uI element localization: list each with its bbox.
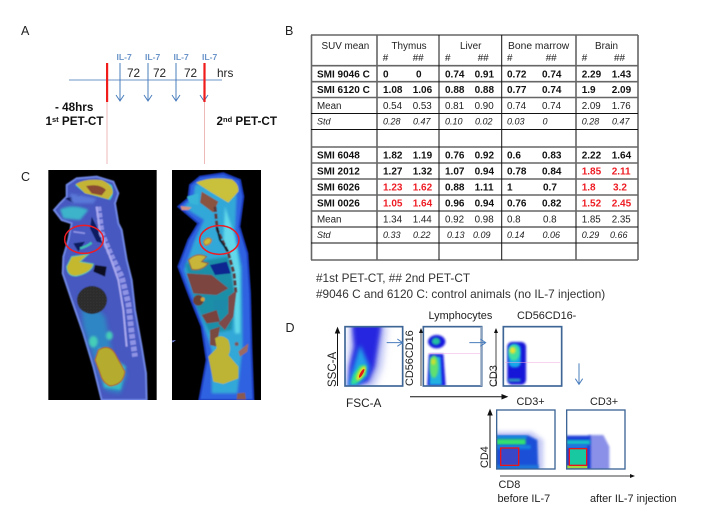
flow plot labels: CD8 [498,479,520,491]
lung [210,262,231,275]
treated mean row [317,214,631,226]
CD3 gate plot [503,327,562,386]
abdominal organs [187,273,228,295]
treated animal rows: 0.76 [507,198,527,210]
SUV table [311,35,638,260]
brain [196,178,238,203]
treated std row: 0.14 [507,230,525,240]
treated animal rows: 0.7 [543,182,557,194]
gut [77,286,107,314]
airway dark areas [65,195,103,252]
control animal rows: 0.77 [507,85,527,96]
control animal rows: SMI 9046 C [317,70,370,80]
brain [76,180,113,199]
PET scan before IL-7 [48,170,157,400]
treated animal rows: 0.94 [475,166,495,178]
first PET-CT label: 1 [46,115,52,128]
table header: Thymus [392,41,427,52]
flow plot labels: CD3+ [516,396,545,408]
table header: # [582,53,588,64]
treated animal rows: 1.64 [612,150,632,162]
first PET-CT label: - 48hrs [55,101,94,114]
control std row: Std [317,116,332,126]
treated animal rows: 0.94 [475,198,495,210]
table header: ## [614,53,625,64]
treated animal rows: 2.22 [582,150,602,162]
table header: # [383,53,389,64]
treated animal rows: 2.45 [612,198,632,210]
table header: # [445,53,451,64]
treated animal rows: 0.78 [507,166,527,178]
control animal rows: 0.74 [542,85,562,96]
control std row: 0.02 [475,116,493,126]
interval labels: hrs [217,66,233,80]
table header: ## [546,53,557,64]
first PET-CT label: PET-CT [59,115,104,128]
treated animal rows: 0.84 [542,166,562,178]
interval labels: 72 [153,66,166,80]
treated animal rows: 1.8 [582,182,596,194]
CD4/CD8 before IL-7 [495,410,555,470]
CD4/CD8 after IL-7 [565,410,625,470]
treated mean row: 2.35 [612,214,631,226]
IL-7 labels [116,52,217,62]
treated animal rows [317,150,632,210]
control mean row: Mean [317,101,342,112]
table header: Liver [460,41,482,52]
treated mean row: 0.92 [445,214,464,226]
panel D flow plots, upper row [345,323,583,388]
control std row: 0 [542,116,548,126]
control animal rows: 1.08 [383,85,403,96]
control mean row [317,101,631,112]
control mean row: 0.74 [542,101,562,112]
flow plot labels: CD3+ [590,396,618,408]
control animal rows: 1.06 [413,85,433,96]
pale drop lines [107,102,204,164]
thymus uptake [203,238,212,245]
first PET-CT label: st [52,115,59,124]
body outline [54,177,147,400]
treated animal rows: 2.11 [612,166,631,178]
treated animal rows: 1.62 [413,182,433,194]
treated mean row: 1.44 [413,214,432,226]
control mean row: 0.54 [383,101,403,112]
first PET-CT label [46,101,104,128]
treated animal rows: 0.83 [542,150,562,162]
interval labels: 72 [184,66,197,80]
control mean row: 0.81 [445,101,464,112]
treated animal rows: 0.6 [507,150,521,162]
panel label D: D [286,321,295,335]
axis arrows [336,328,635,478]
spine [98,207,135,357]
flow plot labels: SSC-A [327,352,339,387]
control animal rows: 1.9 [582,85,596,96]
flow plot labels: CD56CD16 [404,330,416,386]
flow plot labels: FSC-A [346,396,382,410]
treated animal rows: 0.92 [475,150,495,162]
control animal rows: 0 [416,70,422,80]
treated animal rows: 1.32 [413,166,433,178]
table footnotes [316,271,605,301]
treated animal rows: 1 [507,182,513,194]
flow plot labels: Lymphocytes [428,310,493,322]
control animal rows: 0.88 [475,85,495,96]
treated animal rows: 1.23 [383,182,403,194]
treated animal rows: 1.85 [582,166,602,178]
body outline [178,173,253,400]
control mean row: 2.09 [582,101,601,112]
control std row: 0.47 [413,116,432,126]
control animal rows: 2.09 [612,85,632,96]
table header: Bone marrow [508,41,570,52]
control animal rows: 0.91 [475,70,495,80]
flow plot labels: CD56CD16- [517,310,577,322]
panel A: IL-7 timeline [46,52,278,164]
control animal rows: SMI 6120 C [317,85,370,96]
FSC/SSC plot [345,323,403,388]
control animal rows [317,70,632,96]
treated animal rows: 1.27 [383,166,403,178]
PET-CT markers [106,63,206,102]
table grid [311,35,638,260]
treated animal rows: 1.52 [582,198,602,210]
control std row: 0.10 [445,116,463,126]
table header: SUV mean [322,41,369,52]
treated animal rows: SMI 6048 [317,150,360,162]
bladder [208,336,238,384]
treated std row: 0.13 [447,230,465,240]
control animal rows: 0 [383,70,389,80]
control mean row: 0.74 [507,101,527,112]
treated animal rows: 0.96 [445,198,465,210]
control animal rows: 0.72 [507,70,527,80]
treated std row: 0.29 [582,230,599,240]
table header: ## [413,53,424,64]
table header: # [507,53,513,64]
hind uptake [238,343,248,357]
treated std row: 0.22 [413,230,431,240]
table header [322,41,625,64]
treated mean row: Mean [317,214,342,226]
treated std row: 0.33 [383,230,401,240]
treated mean row: 0.98 [475,214,494,226]
heart [188,255,208,270]
bladder [95,347,125,386]
treated std row: 0.66 [610,230,628,240]
panel label C: C [21,170,30,184]
IL-7 labels: IL-7 [145,52,160,62]
panel label B: B [285,24,293,38]
control mean row: 0.90 [475,101,494,112]
treated animal rows: 3.2 [613,182,627,194]
treated animal rows: 0.82 [542,198,562,210]
treated mean row: 0.8 [543,214,557,226]
control std row: 0.28 [582,116,599,126]
panel D flow plots, lower row [495,410,625,470]
interval labels: 72 [127,66,140,80]
control std row [317,116,631,126]
gating arrows [387,339,583,384]
control animal rows: 2.29 [582,70,602,80]
control mean row: 1.76 [612,101,631,112]
treated animal rows: 1.11 [475,182,494,194]
thymus region circle [65,225,103,253]
flow plot labels [327,310,677,505]
treated animal rows: SMI 0026 [317,198,360,210]
treated animal rows: 1.19 [413,150,433,162]
PET scan after IL-7 [172,170,261,400]
treated animal rows: SMI 2012 [317,166,360,178]
treated animal rows: 0.88 [445,182,465,194]
treated animal rows: 1.64 [413,198,433,210]
treated mean row: 1.34 [383,214,403,226]
IL-7 labels: IL-7 [174,52,189,62]
control animal rows: 0.74 [542,70,562,80]
flow plot labels: CD3 [488,365,500,387]
table header: Brain [595,41,618,52]
treated std row: 0.06 [542,230,560,240]
IL-7 injection arrows [116,63,208,101]
treated std row: Std [317,230,332,240]
table footnotes: #1st PET-CT, ## 2nd PET-CT [316,271,470,285]
treated animal rows: 1.07 [445,166,465,178]
second PET-CT label: nd [223,115,233,124]
second PET-CT label: 2 [216,115,223,128]
panel label A: A [21,24,30,38]
flow plot labels: before IL-7 [498,493,550,505]
treated animal rows: 1.05 [383,198,403,210]
control animal rows: 1.43 [612,70,632,80]
control std row: 0.28 [383,116,401,126]
control std row: 0.47 [612,116,631,126]
flow plot labels: CD4 [479,446,491,468]
treated animal rows: 0.76 [445,150,465,162]
control animal rows: 0.88 [445,85,465,96]
thymus region circle [200,226,239,254]
treated animal rows: 1.82 [383,150,403,162]
IL-7 labels: IL-7 [202,52,217,62]
heart [67,254,93,276]
control std row: 0.03 [507,116,525,126]
treated std row: 0.09 [473,230,491,240]
treated std row [317,230,628,240]
control animal rows: 0.74 [445,70,465,80]
spine dark track [215,207,236,293]
control mean row: 0.53 [413,101,432,112]
table header: ## [478,53,489,64]
treated mean row: 0.8 [507,214,521,226]
CD56/CD16 plot [423,327,482,386]
IL-7 labels: IL-7 [116,52,132,62]
treated mean row: 1.85 [582,214,601,226]
second PET-CT label: PET-CT [232,115,278,128]
table footnotes: #9046 C and 6120 C: control animals (no IL-7 injection) [316,287,605,301]
timeline axis [69,79,222,81]
flow plot labels: after IL-7 injection [590,493,677,505]
treated animal rows: SMI 6026 [317,182,360,194]
interval labels [127,66,233,80]
